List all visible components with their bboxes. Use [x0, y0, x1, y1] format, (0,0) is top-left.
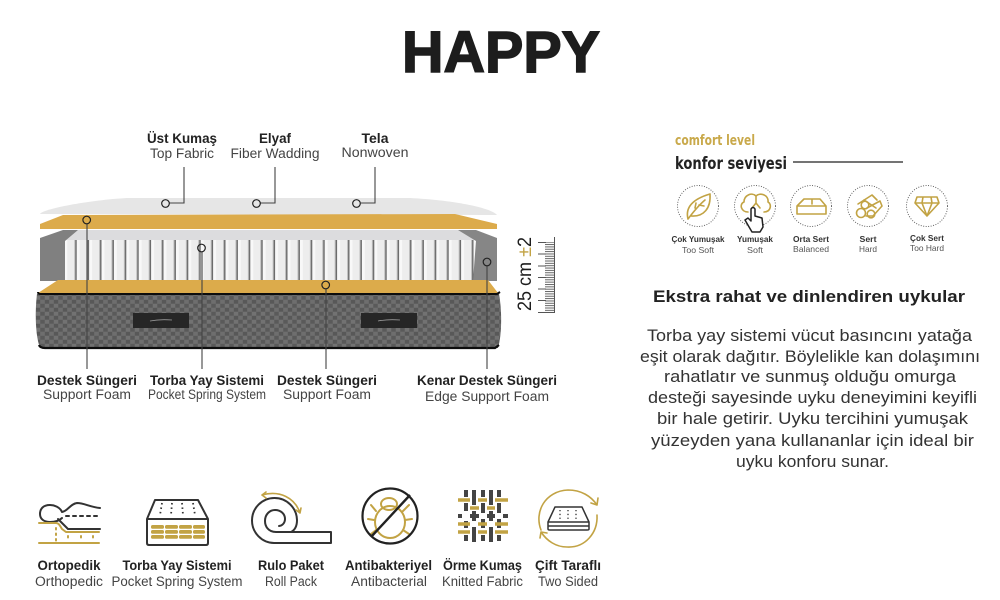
comfort label: too hard	[910, 233, 944, 253]
spring layer top	[64, 230, 476, 240]
top fabric layer	[40, 198, 497, 215]
pocket springs	[64, 240, 476, 280]
callout: support foam centre	[277, 281, 377, 402]
feature: roll pack	[252, 492, 331, 589]
upper support foam layer	[40, 214, 497, 229]
comfort label: hard	[859, 234, 877, 254]
feature: pocket spring	[112, 500, 242, 589]
title: HAPPY	[402, 20, 600, 85]
callout: support foam centre: Destek Süngeri	[277, 373, 377, 388]
feature: pocket spring: Torba Yay Sistemi	[122, 558, 232, 573]
feature: pocket spring: Pocket Spring System	[112, 574, 242, 589]
icon: leaf	[678, 186, 718, 226]
icon: crossed-out bug	[362, 488, 418, 544]
subheading: Ekstra rahat ve dinlendiren uykular	[653, 287, 965, 306]
height ruler	[515, 237, 555, 313]
callout: top fabric	[147, 131, 217, 207]
callout: top fabric: Top Fabric	[150, 146, 214, 161]
feature: orthopedic	[35, 503, 103, 589]
left brand label	[133, 313, 189, 328]
feature: roll pack: Rulo Paket	[258, 558, 324, 573]
callout: pocket spring system: Pocket Spring System	[148, 387, 266, 402]
right edge support block	[458, 230, 497, 281]
callout: nonwoven	[342, 131, 408, 207]
comfort label: hard: Sert	[860, 234, 877, 244]
cover top piping	[38, 292, 500, 294]
icon: diamond	[906, 186, 948, 226]
ruler scale	[538, 237, 555, 313]
feature: roll pack: Roll Pack	[265, 574, 317, 589]
icon: flip arrows and mattress	[539, 490, 598, 547]
feature: knitted fabric: Örme Kumaş	[443, 558, 522, 573]
comfort label: soft: Yumuşak	[737, 234, 773, 244]
callout: fiber wadding: Elyaf	[259, 131, 291, 146]
callout: pocket spring system: Torba Yay Sistemi	[150, 373, 264, 388]
callout: fiber wadding	[230, 131, 320, 207]
feature: orthopedic: Ortopedik	[38, 558, 101, 573]
heading rule	[793, 161, 903, 163]
description text: bir hale getirir. Uyku tercihini yumuşak	[657, 409, 969, 428]
lower support foam layer	[38, 280, 498, 293]
icon: roll	[252, 492, 331, 543]
left edge support block	[40, 230, 78, 281]
callout: fiber wadding: Fiber Wadding	[230, 146, 320, 161]
feature: antibacterial	[345, 488, 432, 589]
height label: 25 cm ±2	[515, 237, 536, 311]
right brand label	[361, 313, 417, 328]
cover bottom piping	[39, 345, 499, 348]
callout: nonwoven: Tela	[362, 131, 389, 146]
description text	[640, 326, 980, 471]
icon: pocket spring mattress	[147, 500, 208, 545]
konfor seviyesi heading: konfor seviyesi	[675, 154, 787, 174]
callout: support foam left: Support Foam	[43, 387, 131, 402]
callout: edge support foam: Kenar Destek Süngeri	[417, 373, 557, 388]
mattress cross-section	[36, 198, 501, 348]
comfort level heading: comfort level	[675, 133, 755, 149]
comfort label: too soft	[672, 234, 725, 255]
feature: two sided	[535, 490, 601, 589]
callout: support foam left	[37, 216, 137, 402]
feature: antibacterial: Antibacterial	[351, 574, 427, 589]
callout: edge support foam	[417, 258, 557, 404]
description text: rahatlatır ve sunmuş olduğu omurga	[664, 367, 957, 386]
comfort label: balanced: Orta Sert	[793, 234, 829, 244]
feature: knitted fabric: Knitted Fabric	[442, 574, 523, 589]
description text: desteği sayesinde uyku deneyimini keyifli	[648, 388, 977, 407]
comfort label: too soft: Too Soft	[682, 245, 715, 255]
callout: support foam left: Destek Süngeri	[37, 373, 137, 388]
comfort label: too soft: Çok Yumuşak	[672, 234, 725, 244]
description text: uyku konforu sunar.	[736, 452, 889, 471]
feature: orthopedic: Orthopedic	[35, 574, 103, 589]
feature: antibacterial: Antibakteriyel	[345, 558, 432, 573]
callout: nonwoven: Nonwoven	[342, 145, 408, 160]
comfort label: soft	[737, 234, 773, 255]
comfort label: too hard: Çok Sert	[910, 233, 944, 243]
comfort label: soft: Soft	[747, 245, 764, 255]
comfort label: hard: Hard	[859, 244, 877, 254]
feature: knitted fabric	[442, 490, 523, 589]
panel: comfort level	[672, 133, 948, 255]
icon: orthopedic	[39, 503, 100, 543]
callout: edge support foam: Edge Support Foam	[425, 389, 549, 404]
callout: top fabric: Üst Kumaş	[147, 131, 217, 146]
comfort label: balanced: Balanced	[793, 244, 829, 254]
callout: pocket spring system	[148, 244, 266, 402]
comfort label: balanced	[793, 234, 829, 254]
icon: logs	[848, 186, 888, 226]
knitted cover	[36, 294, 501, 348]
icon: weave	[458, 490, 508, 542]
description text: eşit olarak dağıtır. Böylelikle kan dolaşımını	[640, 347, 980, 366]
icon: cotton with hand	[734, 186, 776, 232]
description text: Torba yay sistemi vücut basıncını yatağa	[647, 326, 973, 345]
callout: support foam centre: Support Foam	[283, 387, 371, 402]
icon: mattress	[790, 186, 832, 226]
feature: two sided: Çift Taraflı	[535, 558, 601, 573]
comfort label: too hard: Too Hard	[910, 243, 944, 253]
feature: two sided: Two Sided	[538, 574, 598, 589]
description text: yüzeyden yana kullananlar için ideal bir	[651, 431, 974, 450]
